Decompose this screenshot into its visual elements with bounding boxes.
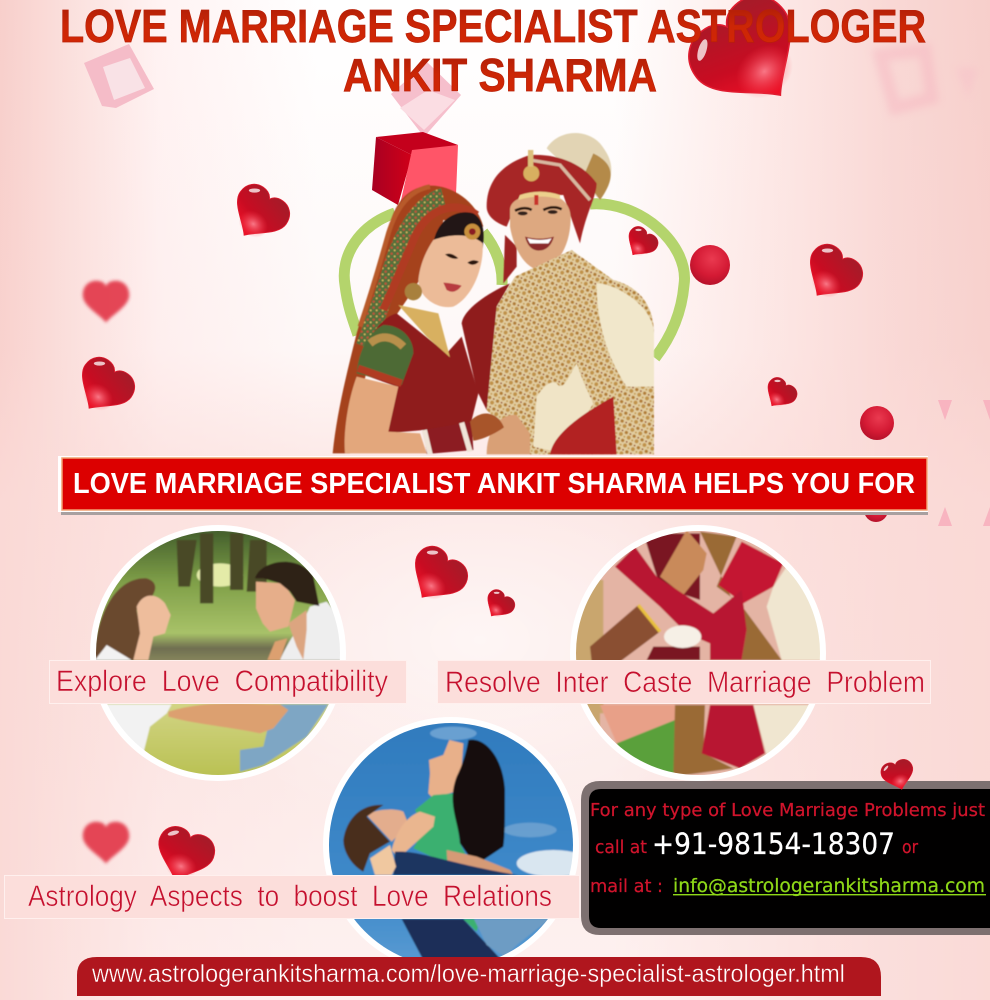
heart beside groom xyxy=(620,223,662,264)
contact box: info@astrologerankitsharma.com xyxy=(673,875,985,897)
groom sherwani xyxy=(462,250,654,454)
contact box: or xyxy=(902,837,919,858)
url bar xyxy=(77,957,881,996)
label: astrology aspects: Astrology Aspects to boost Love Relations xyxy=(28,880,552,913)
bride arm and bangles xyxy=(345,377,504,454)
label: resolve inter caste marriage problem: Resolve Inter Caste Marriage Problem xyxy=(445,666,925,699)
contact box: mail at : xyxy=(590,876,663,897)
couple photo xyxy=(333,133,654,454)
red sphere upper xyxy=(690,245,730,285)
blurred heart left upper xyxy=(83,281,129,322)
bride blouse xyxy=(357,305,478,433)
small pink triangles right edge xyxy=(938,400,990,526)
heart right top xyxy=(794,238,869,311)
groom face xyxy=(510,192,571,270)
heart lower left xyxy=(148,822,219,890)
label: resolve inter caste marriage problem xyxy=(438,660,930,704)
contact box: +91-98154-18307 xyxy=(652,827,895,861)
circle photo: couple in park xyxy=(87,525,347,781)
heart left of couple xyxy=(221,178,296,251)
green ring behind couple xyxy=(344,204,684,358)
label: explore love compatibility: Explore Love Compatibility xyxy=(56,665,388,698)
banner: LOVE MARRIAGE SPECIALIST ANKIT SHARMA HELPS YOU FOR xyxy=(73,468,915,500)
title xyxy=(60,0,926,101)
blurred cube top right xyxy=(880,50,978,108)
groom turban xyxy=(487,133,611,283)
circle photo: couple embracing under sky xyxy=(323,717,579,957)
url bar: www.astrologerankitsharma.com/love-marriage-specialist-astrologer.html xyxy=(91,960,845,988)
circle photo: wedding knot xyxy=(567,525,827,781)
contact box: For any type of Love Marriage Problems just xyxy=(590,800,985,821)
heart far left xyxy=(66,351,141,424)
banner xyxy=(58,456,928,515)
heart on contact box xyxy=(879,757,918,794)
bride veil xyxy=(333,186,483,453)
pink cube over red cube xyxy=(391,62,461,137)
red cube xyxy=(372,132,458,205)
contact box: call at xyxy=(595,837,647,858)
heart centre xyxy=(399,540,474,613)
title: ANKIT SHARMA xyxy=(343,49,657,101)
large heart top right xyxy=(676,0,824,129)
red sphere lower xyxy=(860,406,894,440)
pink cube top left xyxy=(84,44,154,108)
bride hair and face xyxy=(405,212,484,307)
contact box xyxy=(581,781,990,935)
blurred heart left lower xyxy=(83,822,129,864)
small heart right xyxy=(759,374,801,415)
label: astrology aspects xyxy=(4,876,580,918)
small heart centre xyxy=(479,586,518,624)
red sphere behind banner xyxy=(864,498,888,522)
